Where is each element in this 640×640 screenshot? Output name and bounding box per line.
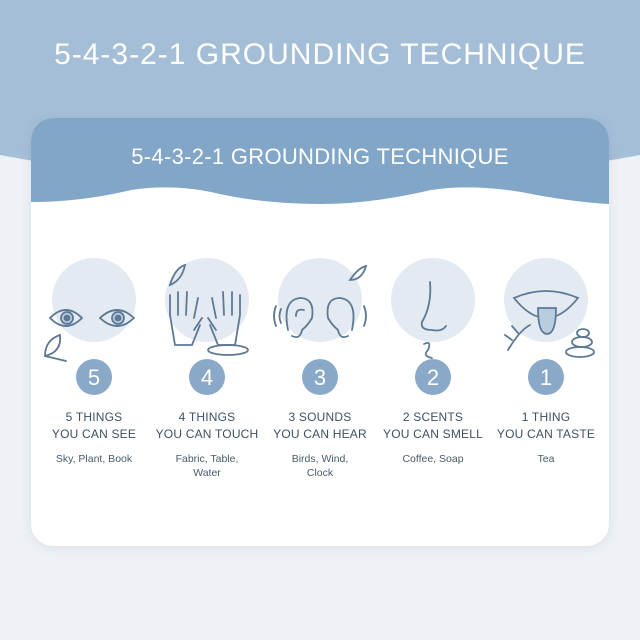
icons: 4 [201, 365, 213, 390]
column: taste: YOU CAN TASTE [497, 427, 595, 441]
icon: mouth [505, 291, 594, 357]
icon: ears [274, 266, 366, 337]
column: smell [383, 410, 483, 465]
icons: 3 [314, 365, 326, 390]
column: taste: Tea [538, 453, 554, 465]
column: see: Sky, Plant, Book [56, 453, 132, 465]
title: 5-4-3-2-1 GROUNDING TECHNIQUE [54, 38, 586, 71]
column: taste: 1 THING [522, 410, 570, 424]
column: see [52, 410, 136, 465]
icon: nose [422, 282, 446, 358]
icon: hands [170, 265, 248, 355]
column: smell: YOU CAN SMELL [383, 427, 483, 441]
card header wave [31, 118, 609, 204]
column: touch: YOU CAN TOUCH [156, 427, 258, 441]
column: smell: Coffee, Soap [402, 453, 464, 465]
column: taste [497, 410, 595, 465]
column: hear [273, 410, 367, 479]
panel: card [31, 118, 609, 546]
column: hear: YOU CAN HEAR [273, 427, 367, 441]
column: see: YOU CAN SEE [52, 427, 136, 441]
column: touch: Water [193, 467, 221, 479]
column: touch [156, 410, 258, 479]
column: touch: Fabric, Table, [176, 453, 238, 465]
column: hear: Clock [307, 467, 333, 479]
icons: 1 [540, 365, 552, 390]
column: hear: Birds, Wind, [292, 453, 348, 465]
icon: eyes [45, 310, 134, 361]
column: touch: 4 THINGS [179, 410, 235, 424]
column: see: 5 THINGS [66, 410, 122, 424]
icons: 2 [427, 365, 439, 390]
column: smell: 2 SCENTS [403, 410, 463, 424]
card heading: 5-4-3-2-1 GROUNDING TECHNIQUE [131, 144, 509, 169]
number badges [76, 359, 564, 395]
icons: 5 [88, 365, 100, 390]
column: hear: 3 SOUNDS [289, 410, 351, 424]
